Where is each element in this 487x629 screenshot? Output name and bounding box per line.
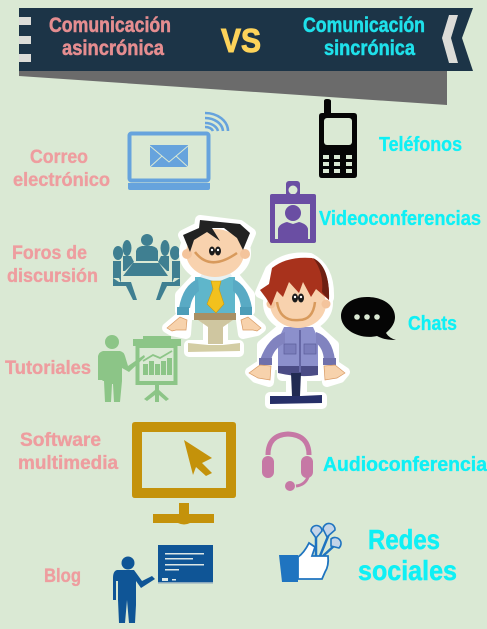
label: Software multimedia: Software (20, 430, 101, 451)
label: Redes sociales (358, 524, 457, 586)
shirt (278, 327, 318, 373)
heading: asynchronous (49, 14, 171, 60)
label: Teléfonos: Teléfonos (379, 134, 462, 156)
hands (249, 365, 271, 380)
label: Software multimedia (18, 430, 118, 474)
header banner (19, 8, 473, 71)
character: man with tie (167, 220, 261, 352)
hands (167, 317, 187, 331)
label: Correo electrónico: Correo (30, 147, 88, 168)
heading: asynchronous: asincrónica (62, 37, 164, 60)
label: Redes sociales: Redes (368, 524, 440, 555)
heading: synchronous (303, 14, 425, 60)
icon: laptop with envelope (128, 113, 228, 190)
arms and shirt (195, 277, 235, 314)
label: Redes sociales: sociales (358, 555, 457, 586)
icon: tutorial presenter with chart (98, 335, 181, 402)
heading: synchronous: Comunicación (303, 14, 425, 37)
label: Foros de discursión: Foros de (12, 243, 87, 264)
label: Tutoriales: Tutoriales (5, 358, 91, 379)
head (270, 280, 326, 328)
label: Foros de discursión: discursión (7, 266, 98, 287)
label: Blog: Blog (44, 566, 81, 587)
icon: meeting table (113, 234, 180, 300)
heading: asynchronous: Comunicación (49, 14, 171, 37)
eyes (292, 294, 298, 302)
label: Chats: Chats (408, 313, 457, 335)
icon: video conference badge (270, 181, 316, 243)
tie (207, 281, 224, 313)
eyes (209, 246, 215, 256)
heading: synchronous: sincrónica (324, 37, 415, 60)
pants and shoes (291, 373, 301, 396)
icon: headset (262, 434, 313, 491)
head (186, 229, 244, 277)
pants (194, 313, 236, 320)
label: Software multimedia: multimedia (18, 453, 118, 474)
icon: chat bubble (341, 297, 396, 340)
icon: monitor with cursor (132, 422, 236, 524)
smile (195, 252, 237, 262)
banner shadow (19, 71, 447, 105)
hair (183, 220, 250, 252)
icon: blog presenter with board (113, 545, 213, 623)
icon: mobile phone (319, 99, 357, 178)
heading: VS: VS (221, 22, 261, 59)
label: Audioconferencia: Audioconferencia (323, 454, 487, 476)
icon: social like hand with balloons (279, 523, 341, 582)
label: Correo electrónico: electrónico (13, 170, 110, 191)
hair (260, 258, 329, 306)
label: Correo electrónico (13, 147, 110, 191)
label: Foros de discursión (7, 243, 98, 287)
smile (277, 302, 315, 320)
character: man with red hair (249, 258, 345, 404)
